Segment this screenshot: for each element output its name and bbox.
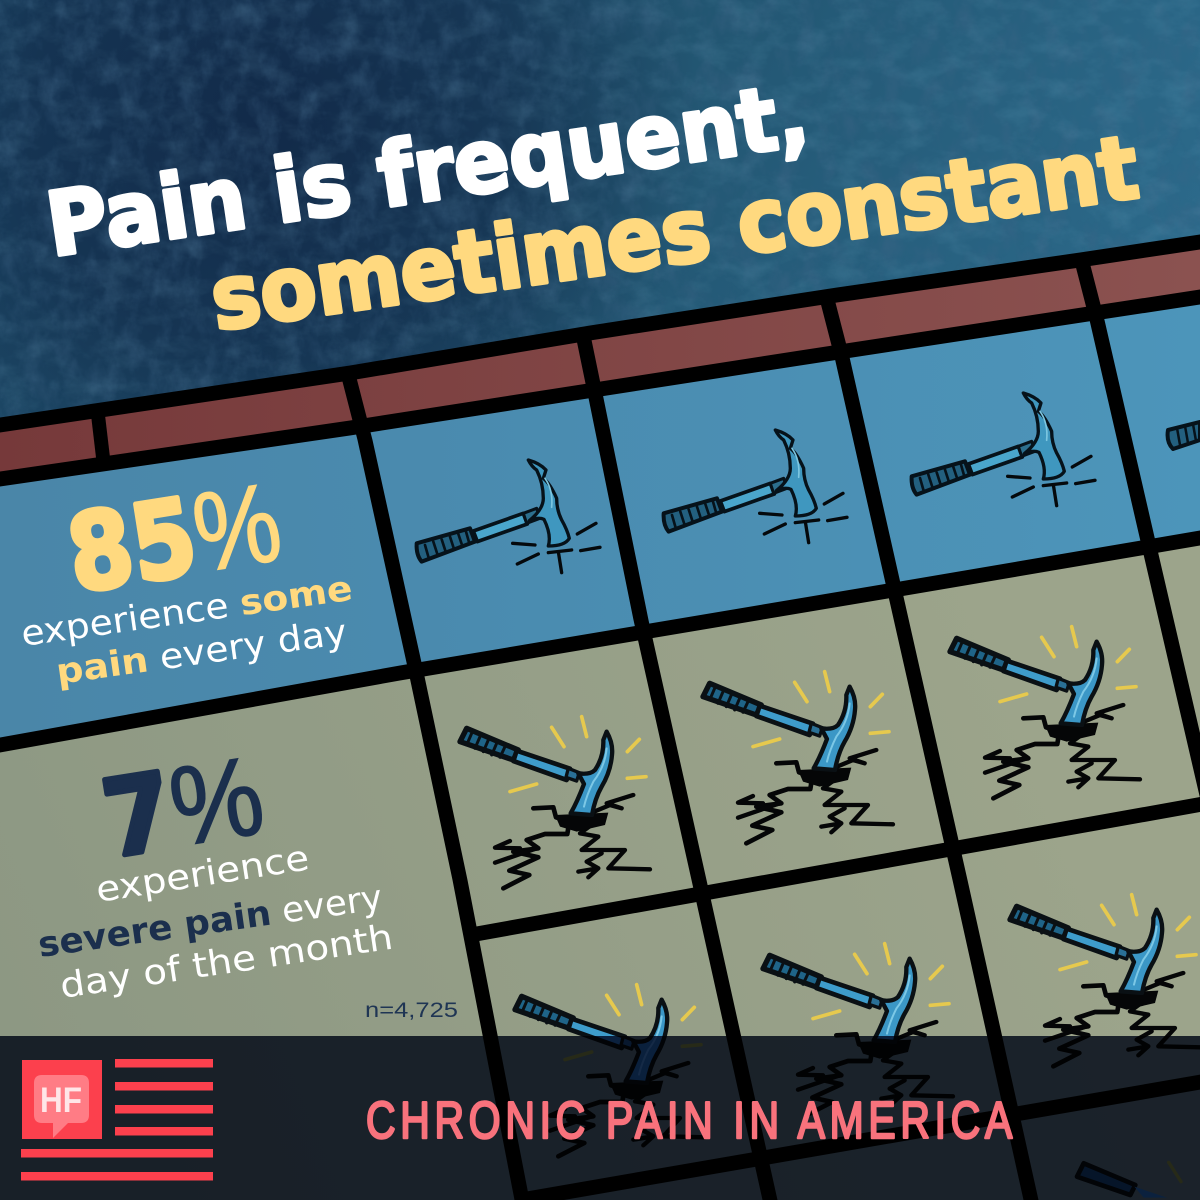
icon: hammer tapping nail 1	[417, 460, 600, 573]
title line 1: Pain is frequent,	[40, 63, 815, 277]
logo letters: HF	[40, 1081, 82, 1120]
stat: 7% severe pain every day of the month	[36, 732, 396, 1007]
hammers tapping, mild pain row	[417, 393, 1200, 573]
calendar header band	[0, 242, 1200, 479]
icon: hammer with cracks row 1 col 1	[460, 717, 650, 888]
caption line 1: experience	[93, 838, 312, 911]
caption line 2: pain every day	[54, 613, 349, 693]
icon: hammer with cracks row 2 col 2	[763, 944, 953, 1115]
panel: tan rows, 7% stat background and cells	[0, 538, 1200, 1200]
stat number 85%: 85%	[59, 459, 289, 617]
logo canton	[22, 1060, 102, 1139]
sample size note: n=4,725	[365, 999, 458, 1022]
footer bar	[0, 1036, 1200, 1200]
stat number 7%: 7%	[94, 732, 272, 882]
logo: Health Feedback flag	[21, 1059, 213, 1180]
icon: hammer grip 4, cropped at the page edge	[1168, 422, 1200, 449]
title line 2: sometimes constant	[204, 115, 1144, 351]
icon: hammer with cracks row 2 col 3	[1010, 895, 1200, 1066]
panel: blue row, 85% stat background and cells	[0, 297, 1200, 745]
icon: hammer tapping nail 2	[664, 430, 847, 543]
icon: hammer tapping nail 3	[912, 393, 1095, 506]
icon: hammer with cracks row 1 col 3	[950, 627, 1140, 798]
icon: hammer with cracks row 1 col 2	[703, 672, 893, 843]
caption line 1: experience some	[19, 569, 355, 655]
icon: hammer row 3 col 3, cropped at the page edge	[1077, 1162, 1181, 1198]
stat: 85% some pain every day	[19, 459, 355, 693]
caption line 3: day of the month	[57, 918, 396, 1007]
caption line 2: severe pain every	[36, 878, 385, 966]
footer title: CHRONIC PAIN IN AMERICA	[366, 1092, 1017, 1150]
logo stripes	[21, 1059, 213, 1180]
background: textured dark blue wall	[0, 0, 1200, 418]
hammers cracking ground, severe pain rows	[460, 627, 1200, 1198]
logo speech bubble	[34, 1075, 89, 1138]
icon: hammer with cracks row 2 col 1	[515, 985, 705, 1156]
title	[40, 63, 1144, 351]
